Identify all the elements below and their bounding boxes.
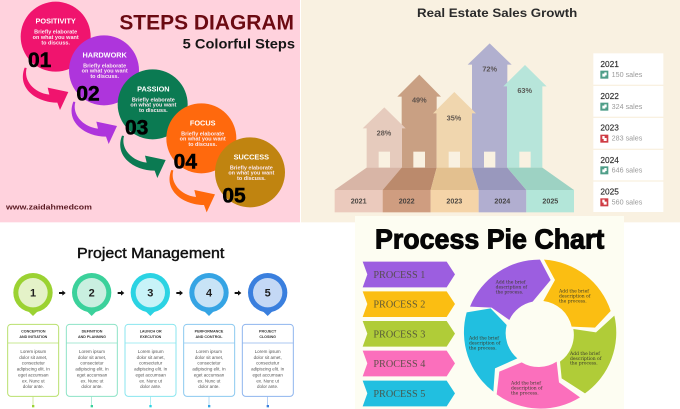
step 2: hardwork: HARDWORK — [82, 51, 128, 60]
step 1: positivity: Briefly elaborate — [34, 30, 77, 36]
card 1: ex. Nunc ut — [22, 378, 45, 383]
step 5: success: on what you want — [228, 171, 275, 177]
step 1: positivity: on what you want — [33, 35, 79, 41]
card 1: adipiscing elit. In — [17, 367, 50, 372]
step 3: passion: Briefly elaborate — [132, 97, 175, 103]
card 3 — [125, 324, 176, 407]
panel: project management — [8, 246, 293, 407]
card 5: adipiscing elit. In — [251, 367, 285, 372]
panel: process pie chart — [355, 216, 624, 409]
step 5: success — [215, 137, 285, 208]
project management title: Project Management — [77, 246, 224, 262]
panel: real estate sales growth — [301, 0, 680, 222]
house 2023: 35% — [447, 113, 462, 122]
card 4: eget accumsan — [194, 372, 225, 377]
segment: yellow: Add the brief — [558, 289, 589, 295]
website text: www.zaidahmedcom — [5, 202, 93, 211]
step 4: focus: on what you want — [180, 137, 226, 143]
card 1: eget accumsan — [18, 372, 49, 377]
card 5: CLOSING — [259, 335, 276, 339]
card 3: LAUNCH OR — [140, 330, 162, 334]
process 2 chevron: PROCESS 2 — [373, 300, 425, 311]
process 1 chevron: PROCESS 1 — [373, 270, 425, 281]
process 5 chevron: PROCESS 5 — [373, 389, 425, 400]
card 1: consectetur — [22, 361, 45, 366]
card 3: dolor ante. — [140, 384, 161, 389]
house 2022 — [397, 75, 441, 168]
card 5: dolor ante. — [257, 384, 278, 389]
card 5: dolor sit amet, — [254, 355, 282, 360]
arrow: step 4 — [170, 170, 215, 212]
card 1: Lorem ipsum — [20, 349, 47, 354]
step pin 3 — [131, 273, 170, 316]
card 1: CONCEPTION — [21, 330, 46, 334]
card 3: EXECUTION — [140, 335, 162, 339]
step pin 4: 4 — [206, 288, 213, 300]
step 1: positivity: 01 — [28, 49, 52, 72]
segment: blue: the process. — [469, 346, 497, 352]
card 2: DEFINITION — [82, 330, 103, 334]
card 2: dolor sit amet, — [78, 355, 106, 360]
card 1 — [8, 324, 59, 407]
card 4: dolor ante. — [198, 384, 220, 389]
step 4: focus: Briefly elaborate — [181, 131, 224, 137]
step pin 5: 5 — [265, 288, 271, 300]
segment: pink: Add the brief — [510, 381, 541, 387]
base year labels: 2022 — [399, 198, 415, 206]
title: steps diagram: STEPS DIAGRAM — [119, 10, 294, 34]
card 4: adipiscing elit. In — [192, 367, 226, 372]
step 3: passion: 03 — [125, 117, 148, 140]
row 2021: 2021 — [600, 59, 619, 69]
segment: purple: description of — [496, 285, 527, 291]
row 2024: 2024 — [600, 155, 619, 165]
segment: pink: description of — [511, 386, 543, 392]
house 2021 — [363, 107, 406, 168]
base year labels: 2021 — [351, 198, 367, 206]
card 5: consectetur — [256, 361, 280, 366]
segment: blue: description of — [469, 341, 501, 347]
segment: purple: Add the brief — [495, 280, 526, 286]
step 4: focus: 04 — [174, 151, 197, 174]
step 5: success: SUCCESS — [234, 153, 269, 162]
row 2022: 2022 — [600, 91, 619, 101]
row 2025 — [593, 182, 663, 212]
segment: pink: the process. — [511, 391, 539, 397]
row 2021: 150 sales — [612, 71, 643, 79]
panel: steps diagram — [0, 0, 300, 222]
card 4: consectetur — [197, 361, 221, 366]
chart title: Real Estate Sales Growth — [417, 6, 577, 20]
arrow 1 to 2 — [59, 290, 66, 296]
arrow 2 to 3 — [118, 290, 124, 296]
card 5: eget accumsan — [252, 372, 283, 377]
house 2024 — [468, 43, 512, 168]
step 3: passion: to discuss. — [139, 108, 168, 114]
house 2021: 28% — [377, 129, 392, 138]
segment: blue: Add the brief — [468, 335, 499, 341]
card 5: Lorem ipsum — [255, 349, 281, 354]
step 2: hardwork: on what you want — [82, 69, 128, 75]
step 4: focus: to discuss. — [188, 142, 217, 148]
step pin 3: 3 — [147, 288, 153, 300]
step 2: hardwork: 02 — [76, 83, 100, 106]
segment: green: description of — [570, 356, 602, 362]
card 2: eget accumsan — [77, 372, 108, 377]
step 2: hardwork: to discuss. — [90, 74, 119, 80]
pie chart title: Process Pie Chart — [375, 223, 604, 254]
base year labels — [335, 190, 574, 212]
card 3: consectetur — [139, 361, 163, 366]
card 3: adipiscing elit. In — [134, 367, 168, 372]
card 5 — [242, 324, 293, 407]
step 1: positivity — [21, 2, 91, 72]
segment: purple: the process. — [496, 290, 523, 296]
process 3 chevron: PROCESS 3 — [373, 329, 425, 340]
segment: green — [560, 316, 616, 393]
segment: yellow: description of — [559, 294, 591, 300]
card 4 — [184, 324, 235, 407]
card 3: Lorem ipsum — [138, 349, 164, 354]
card 4: dolor sit amet, — [195, 355, 223, 360]
step pin 2: 2 — [89, 288, 95, 300]
segment: yellow — [543, 260, 611, 328]
process 4 chevron — [363, 351, 455, 376]
step 2: hardwork: Briefly elaborate — [83, 63, 126, 69]
sales sidebar — [593, 53, 663, 212]
card 2: dolor ante. — [81, 384, 103, 389]
base year labels: 2024 — [494, 198, 510, 206]
process 2 chevron — [363, 291, 455, 317]
step pin 2 — [72, 273, 111, 316]
segment: blue — [464, 308, 517, 392]
process 1 chevron — [363, 262, 455, 287]
arrow 4 to 5 — [235, 290, 241, 296]
card 2: ex. Nunc ut — [81, 378, 104, 383]
card 3: dolor sit amet, — [137, 355, 165, 360]
step 3: passion: PASSION — [137, 85, 170, 94]
row 2022: 324 sales — [612, 103, 643, 111]
row 2024 — [593, 150, 663, 180]
pie ring — [464, 260, 616, 409]
arrow 3 to 4 — [176, 290, 183, 296]
segment: green: the process. — [570, 361, 598, 367]
process 3 chevron — [363, 321, 455, 347]
arrow: step 2 — [72, 102, 117, 144]
house arrow chart — [335, 43, 574, 212]
step pin 1 — [13, 273, 53, 316]
step 3: passion: on what you want — [130, 103, 177, 109]
card 5: ex. Nunc ut — [256, 378, 280, 383]
house 2022: 49% — [412, 96, 427, 105]
segment: green: Add the brief — [569, 351, 600, 357]
card 2 — [66, 324, 117, 407]
card 2: adipiscing elit. In — [75, 367, 109, 372]
process 4 chevron: PROCESS 4 — [373, 359, 425, 370]
card 4: Lorem ipsum — [196, 349, 222, 354]
step 1: positivity: to discuss. — [41, 40, 70, 46]
card 2: AND PLANNING — [78, 335, 106, 339]
step 5: success: Briefly elaborate — [230, 165, 273, 171]
card 1: dolor ante. — [23, 384, 44, 389]
step 1: positivity: POSITIVITY — [36, 16, 76, 25]
base perspective — [335, 168, 574, 190]
subtitle: 5 colorful steps: 5 Colorful Steps — [183, 36, 295, 52]
step pin 5 — [248, 273, 287, 316]
card 4: ex. Nunc ut — [198, 378, 221, 383]
process 5 chevron — [363, 381, 455, 406]
card 2: Lorem ipsum — [79, 349, 105, 354]
step 2: hardwork — [69, 35, 139, 106]
card 4: PERFORMANCE — [195, 330, 224, 334]
card 1: dolor sit amet, — [19, 355, 47, 360]
card 2: consectetur — [80, 361, 104, 366]
arrow: step 1 — [23, 68, 68, 110]
row 2023 — [593, 118, 663, 149]
row 2025: 560 sales — [612, 198, 643, 206]
base year labels: 2023 — [446, 198, 462, 206]
step 4: focus — [166, 103, 236, 174]
segment: pink — [497, 362, 580, 409]
base year labels: 2025 — [542, 198, 558, 206]
card 5: PROJECT — [259, 330, 277, 334]
row 2024: 646 sales — [612, 167, 643, 175]
row 2021 — [593, 53, 663, 85]
arrow: step 3 — [120, 136, 166, 178]
house 2025: 63% — [517, 86, 532, 95]
row 2023: 283 sales — [612, 135, 643, 143]
row 2022 — [593, 86, 663, 117]
step 5: success: to discuss. — [237, 176, 266, 182]
step 3: passion — [118, 69, 188, 140]
card 1: AND INITIATION — [19, 335, 48, 339]
step pin 1: 1 — [30, 288, 36, 300]
card 4: AND CONTROL — [195, 335, 223, 339]
segment: purple — [470, 260, 551, 320]
segment: yellow: the process. — [559, 298, 587, 304]
row 2023: 2023 — [600, 123, 619, 133]
house 2025 — [503, 65, 547, 168]
house 2023 — [433, 92, 476, 168]
step pin 4 — [189, 273, 229, 316]
house 2024: 72% — [482, 64, 497, 73]
card 3: eget accumsan — [135, 372, 166, 377]
step 5: success: 05 — [222, 185, 246, 208]
row 2025: 2025 — [600, 186, 619, 196]
card 3: ex. Nunc ut — [139, 378, 163, 383]
step 4: focus: FOCUS — [190, 119, 216, 128]
